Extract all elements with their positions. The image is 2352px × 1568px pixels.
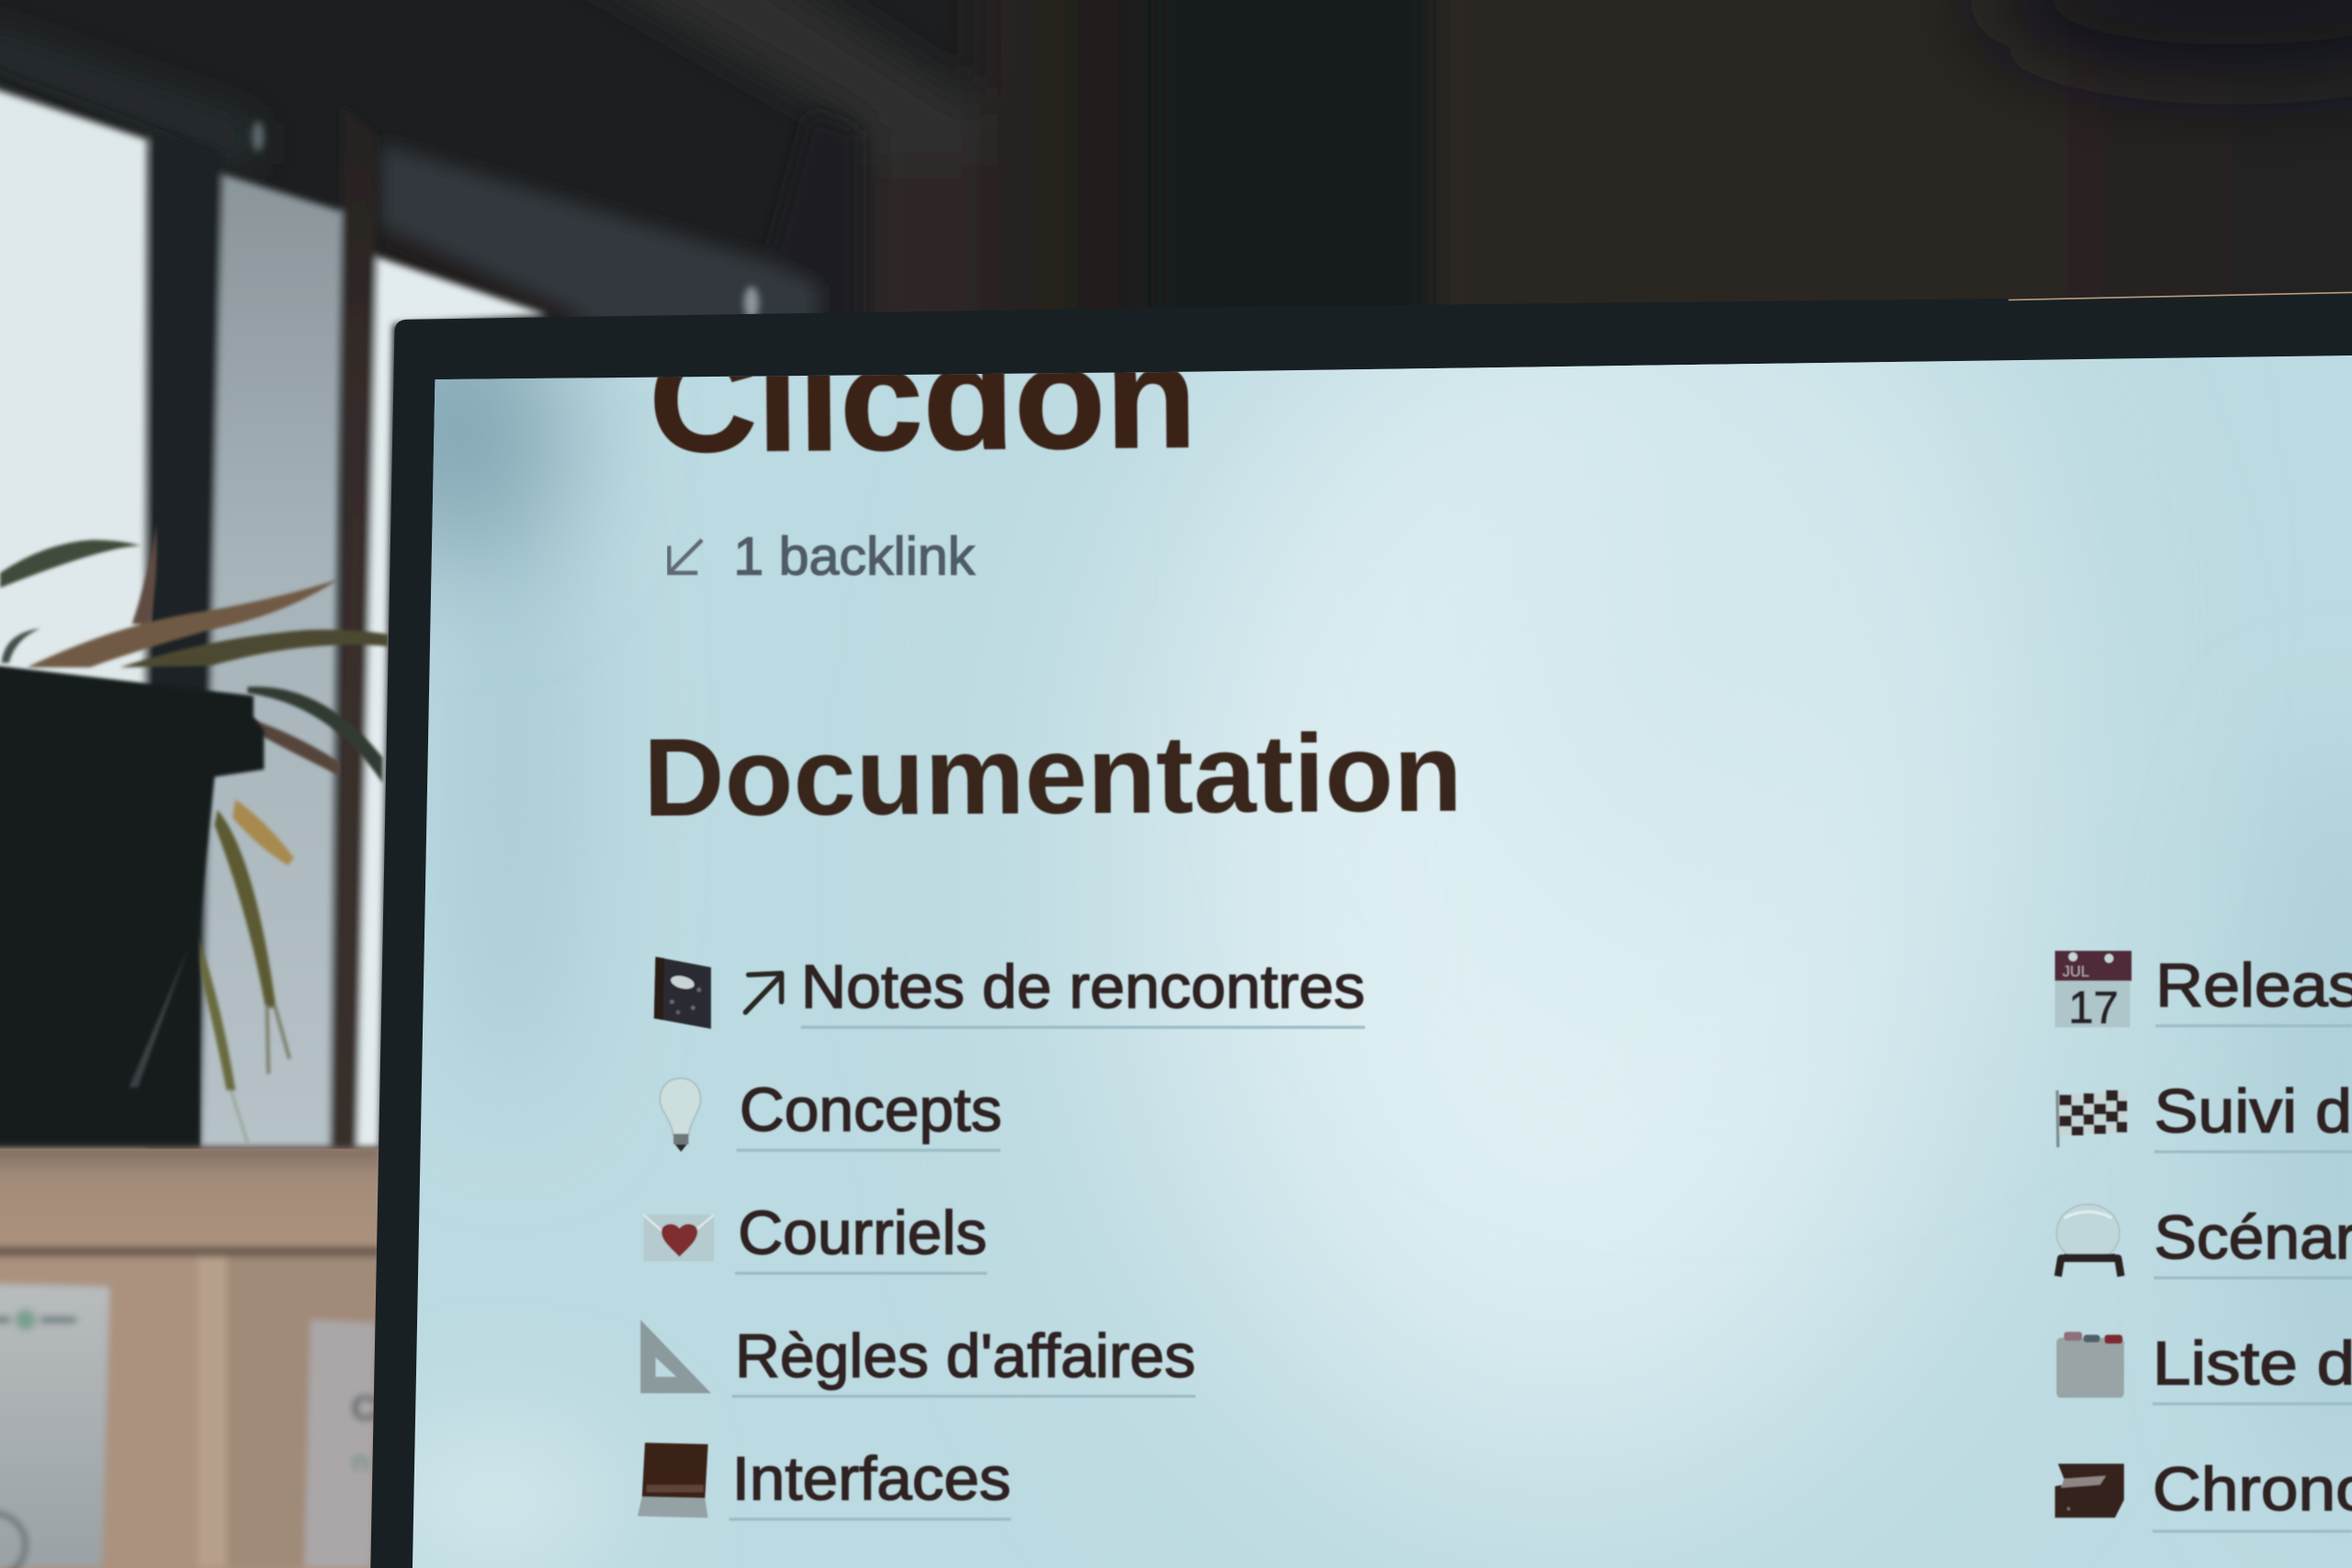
card letters [351, 1389, 377, 1478]
underline [737, 1149, 1001, 1151]
label: Notes de rencontres [801, 953, 1365, 1021]
label: Interfaces [732, 1445, 1011, 1514]
leaf: olive drooping [214, 810, 276, 1008]
plant [0, 525, 389, 1143]
plant pot [0, 664, 264, 1149]
screen glow [413, 355, 2352, 1568]
label: Scénar [2154, 1203, 2352, 1272]
leaf: small curl [2, 628, 40, 663]
window pane left [0, 85, 147, 1149]
card letters: C [351, 1389, 377, 1428]
card letters: n [351, 1444, 369, 1478]
icon: card file box [2056, 1332, 2124, 1398]
shelf base [0, 1149, 381, 1568]
label: Suivi d [2154, 1077, 2352, 1146]
section heading: Documentation [643, 711, 1463, 840]
window pane right [357, 256, 548, 1149]
leaf: olive long [120, 629, 389, 668]
list item: Release [2055, 951, 2352, 1033]
page title: Clicdon [649, 313, 1197, 482]
top right dark patch [1980, 0, 2352, 75]
shelf back [0, 1257, 381, 1567]
backlink arrow [669, 540, 702, 573]
icon: calendar: 17 [2068, 984, 2119, 1033]
underline [2154, 1151, 2352, 1153]
icon: laptop [638, 1443, 708, 1517]
underline [2155, 1025, 2352, 1027]
blind highlight [252, 121, 264, 152]
icon: calendar: JUL [2063, 964, 2089, 980]
leaf: pale tip [231, 1090, 247, 1143]
underline [2153, 1530, 2352, 1532]
label: Courriels [738, 1199, 987, 1268]
brown post [330, 107, 377, 1149]
list item: Scenarios [2056, 1203, 2352, 1278]
label: Chrono [2153, 1455, 2352, 1524]
icon: love letter [643, 1214, 714, 1261]
underline [2153, 1403, 2352, 1404]
leaf: yellow [232, 799, 294, 865]
label: Concepts [740, 1076, 1002, 1145]
icon: checkered flag [2057, 1090, 2127, 1147]
bezel highlight [2008, 292, 2352, 300]
icon: set square [640, 1320, 711, 1393]
second compartment [227, 1257, 381, 1567]
frosted panel [201, 174, 342, 1149]
card right [304, 1320, 375, 1567]
label: Liste d [2153, 1329, 2352, 1398]
leaf on pot [129, 946, 189, 1088]
background: room and window [0, 0, 2352, 360]
shelf top board [0, 1147, 381, 1247]
list item: Notes de rencontres [654, 953, 1365, 1029]
divider [198, 1257, 227, 1567]
icon: crystal ball [2056, 1204, 2121, 1276]
icon: archive box [2055, 1464, 2124, 1517]
card circle [0, 1513, 26, 1568]
icon: link arrow [745, 974, 782, 1012]
monitor bezel [370, 292, 2352, 1568]
list item: Suivi [2057, 1077, 2352, 1152]
leaf: brown right [240, 716, 339, 775]
leaf: dark right [247, 687, 382, 783]
leaf: upright brown [132, 525, 157, 624]
icon: light bulb [660, 1078, 700, 1152]
underline [801, 1026, 1365, 1028]
underline [732, 1395, 1195, 1397]
label: Règles d'affaires [735, 1322, 1195, 1391]
backlink label: 1 backlink [733, 527, 976, 586]
leaf: lower olive [192, 930, 235, 1090]
list item: Concepts [660, 1076, 1002, 1152]
window mullion [144, 132, 219, 1149]
underline [2154, 1277, 2352, 1279]
icon: notebook [654, 957, 711, 1029]
card left [0, 1284, 109, 1567]
leaf: green arc [0, 540, 141, 588]
shelf [0, 1147, 381, 1568]
underline [735, 1272, 987, 1274]
list item: Liste [2056, 1329, 2352, 1404]
leaf: fork tips [267, 1005, 289, 1074]
list item: Chronologie [2055, 1455, 2352, 1531]
label: Releas [2155, 952, 2352, 1021]
shelf shadow [0, 1247, 381, 1257]
list item: Regles d'affaires [640, 1320, 1195, 1396]
card logo [0, 1309, 76, 1330]
leaf: broad brown [27, 579, 339, 668]
icon: calendar [2055, 951, 2132, 1033]
underline [729, 1518, 1011, 1520]
monitor screen [413, 355, 2352, 1568]
list item: Courriels [643, 1199, 987, 1273]
list item: Interfaces [638, 1443, 1011, 1519]
